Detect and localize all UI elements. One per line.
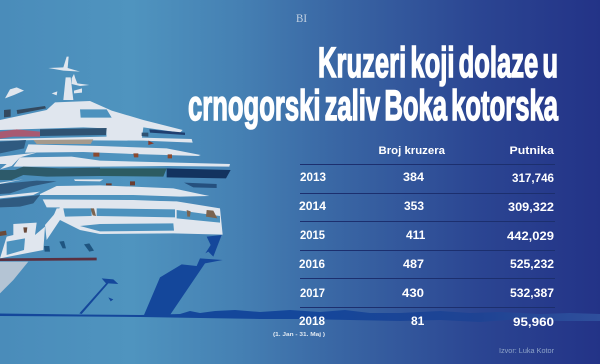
column header: Broj kruzera: Broj kruzera <box>378 145 446 157</box>
date range note: (1. Jan - 31. Maj ) <box>273 332 325 338</box>
row 2016: 525,232 <box>510 257 554 271</box>
ship bow and hull <box>0 200 223 293</box>
table dividers <box>300 164 555 308</box>
row 2013 <box>300 170 554 185</box>
column header: Putnika: Putnika <box>510 145 555 157</box>
row 2015 <box>300 228 554 243</box>
row 2013: 384 <box>403 170 424 184</box>
row 2017 <box>300 286 554 300</box>
row 2018: 81 <box>411 314 425 328</box>
row 2018 <box>299 314 554 329</box>
row 2013: 317,746 <box>512 171 554 185</box>
hull shadow <box>79 235 223 315</box>
data table <box>273 145 555 338</box>
row 2014: 2014 <box>299 199 326 213</box>
row 2013: 2013 <box>300 170 326 184</box>
row 2018: 95,960 <box>513 315 554 329</box>
row 2016: 2016 <box>299 257 325 271</box>
row 2015: 411 <box>406 228 426 242</box>
row 2017: 532,387 <box>510 286 554 300</box>
row 2016: 487 <box>403 257 424 271</box>
row 2016 <box>299 257 554 271</box>
row 2014: 353 <box>404 199 424 213</box>
row 2017: 430 <box>402 286 424 300</box>
row 2018: 2018 <box>299 314 325 328</box>
logo: BI <box>296 11 307 25</box>
row 2014: 309,322 <box>508 200 554 214</box>
source note: Izvor: Luka Kotor <box>499 348 555 355</box>
waterline <box>0 310 600 322</box>
row 2015: 442,029 <box>507 229 554 243</box>
row 2015: 2015 <box>300 228 325 242</box>
row 2014 <box>299 199 554 214</box>
row 2017: 2017 <box>300 286 325 300</box>
title <box>188 39 559 130</box>
ship upper decks <box>0 57 231 220</box>
cruise ship illustration <box>0 57 600 322</box>
